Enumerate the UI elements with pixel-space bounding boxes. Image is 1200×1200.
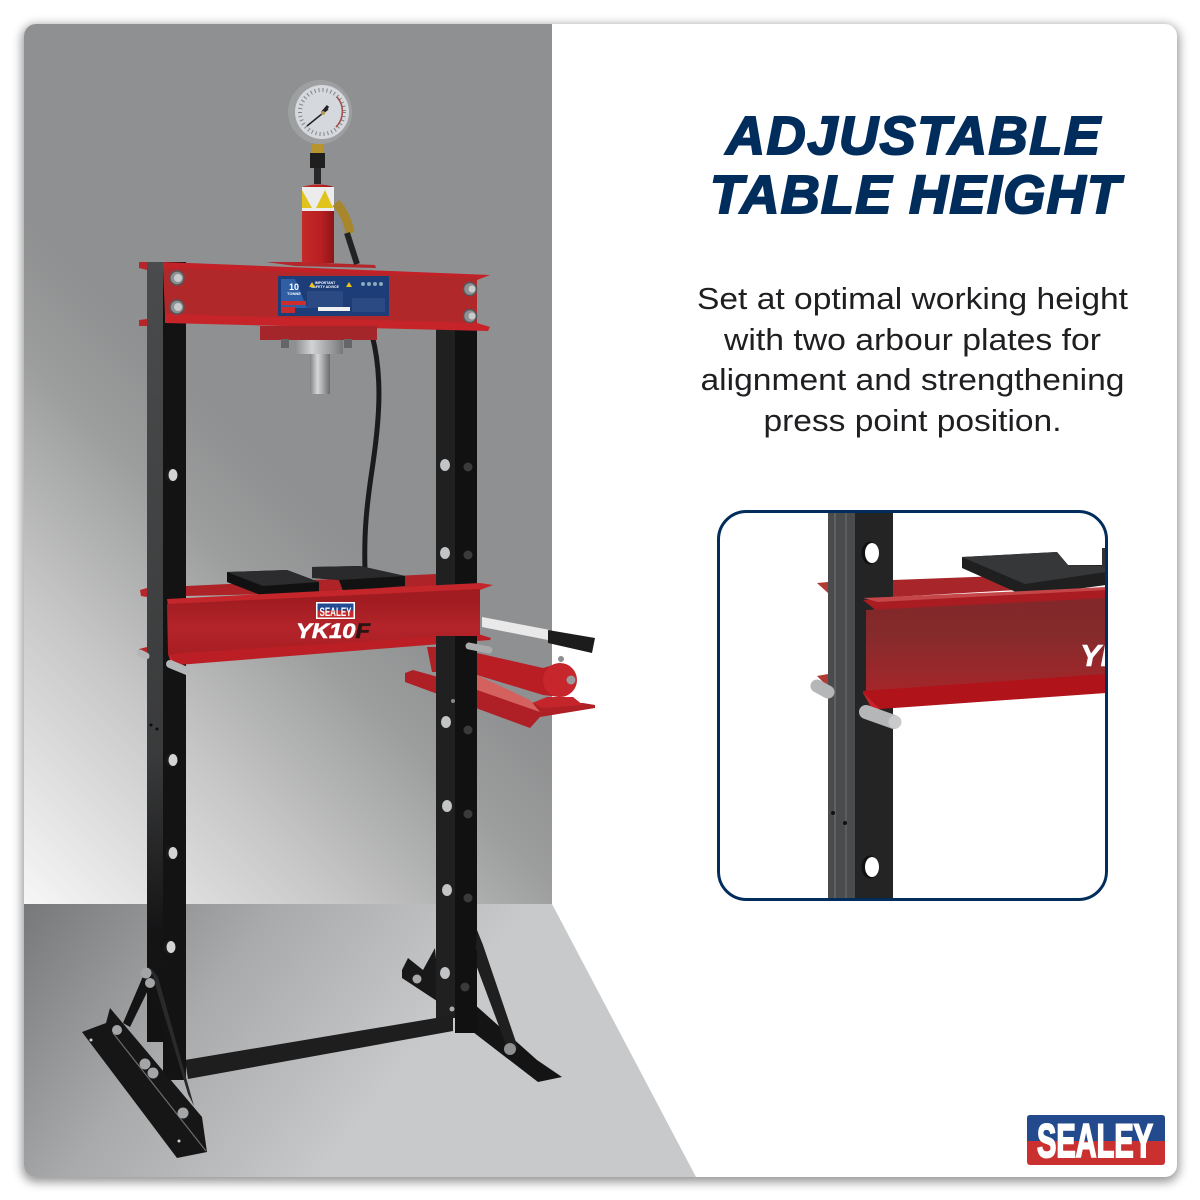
panel: detail inset — [718, 511, 1126, 900]
rear table flange — [139, 574, 436, 657]
heading: TABLE HEIGHT — [710, 165, 1124, 225]
description text: Set at optimal working height — [697, 281, 1128, 316]
cross bar — [185, 1016, 453, 1079]
left post — [147, 262, 186, 1080]
post segment in front of pump — [436, 636, 477, 746]
gauge stem — [310, 144, 325, 184]
hydraulic press illustration — [82, 80, 595, 1158]
model name: YK10 F — [296, 620, 371, 643]
panel: product photo backdrop — [24, 24, 696, 1177]
inset beam — [858, 587, 1106, 709]
wall — [24, 24, 552, 905]
beam logo badge: SEALEY — [320, 605, 352, 619]
rear flange — [817, 582, 828, 593]
left foot and brace — [82, 967, 207, 1158]
description text: alignment and strengthening — [700, 362, 1124, 397]
hose fitting — [336, 203, 350, 233]
table beam — [167, 583, 493, 665]
right foot and brace — [402, 930, 562, 1082]
description text — [697, 281, 1128, 438]
description text: with two arbour plates for — [723, 322, 1101, 357]
safety label — [278, 276, 389, 316]
pressure gauge — [288, 80, 352, 144]
beam logo badge — [316, 602, 355, 619]
inset post — [828, 511, 893, 900]
heading — [710, 106, 1124, 225]
front pin — [866, 712, 902, 728]
top beam — [139, 262, 490, 340]
inset frame — [718, 512, 1106, 900]
arbour plate — [962, 548, 1105, 592]
cylinder — [302, 184, 334, 263]
pump handle — [482, 617, 550, 640]
safety label: TONNE — [287, 291, 301, 296]
arbour plates — [227, 566, 405, 596]
safety label: IMPORTANT — [315, 281, 336, 285]
pump base tray — [405, 670, 595, 728]
pins — [140, 653, 187, 671]
right pin — [469, 646, 489, 650]
pump body — [427, 647, 437, 672]
safety label: SAFETY ADVICE — [311, 285, 340, 289]
hand pump — [405, 617, 595, 728]
hose — [365, 335, 379, 570]
ram — [281, 339, 352, 394]
safety label: 10 — [289, 282, 299, 292]
heading: ADJUSTABLE — [724, 106, 1102, 166]
floor — [24, 904, 696, 1177]
bolts — [170, 271, 476, 322]
beam lettering: YK — [1080, 638, 1126, 673]
description text: press point position. — [764, 403, 1062, 438]
right post — [436, 328, 477, 1033]
left pin — [817, 686, 828, 692]
